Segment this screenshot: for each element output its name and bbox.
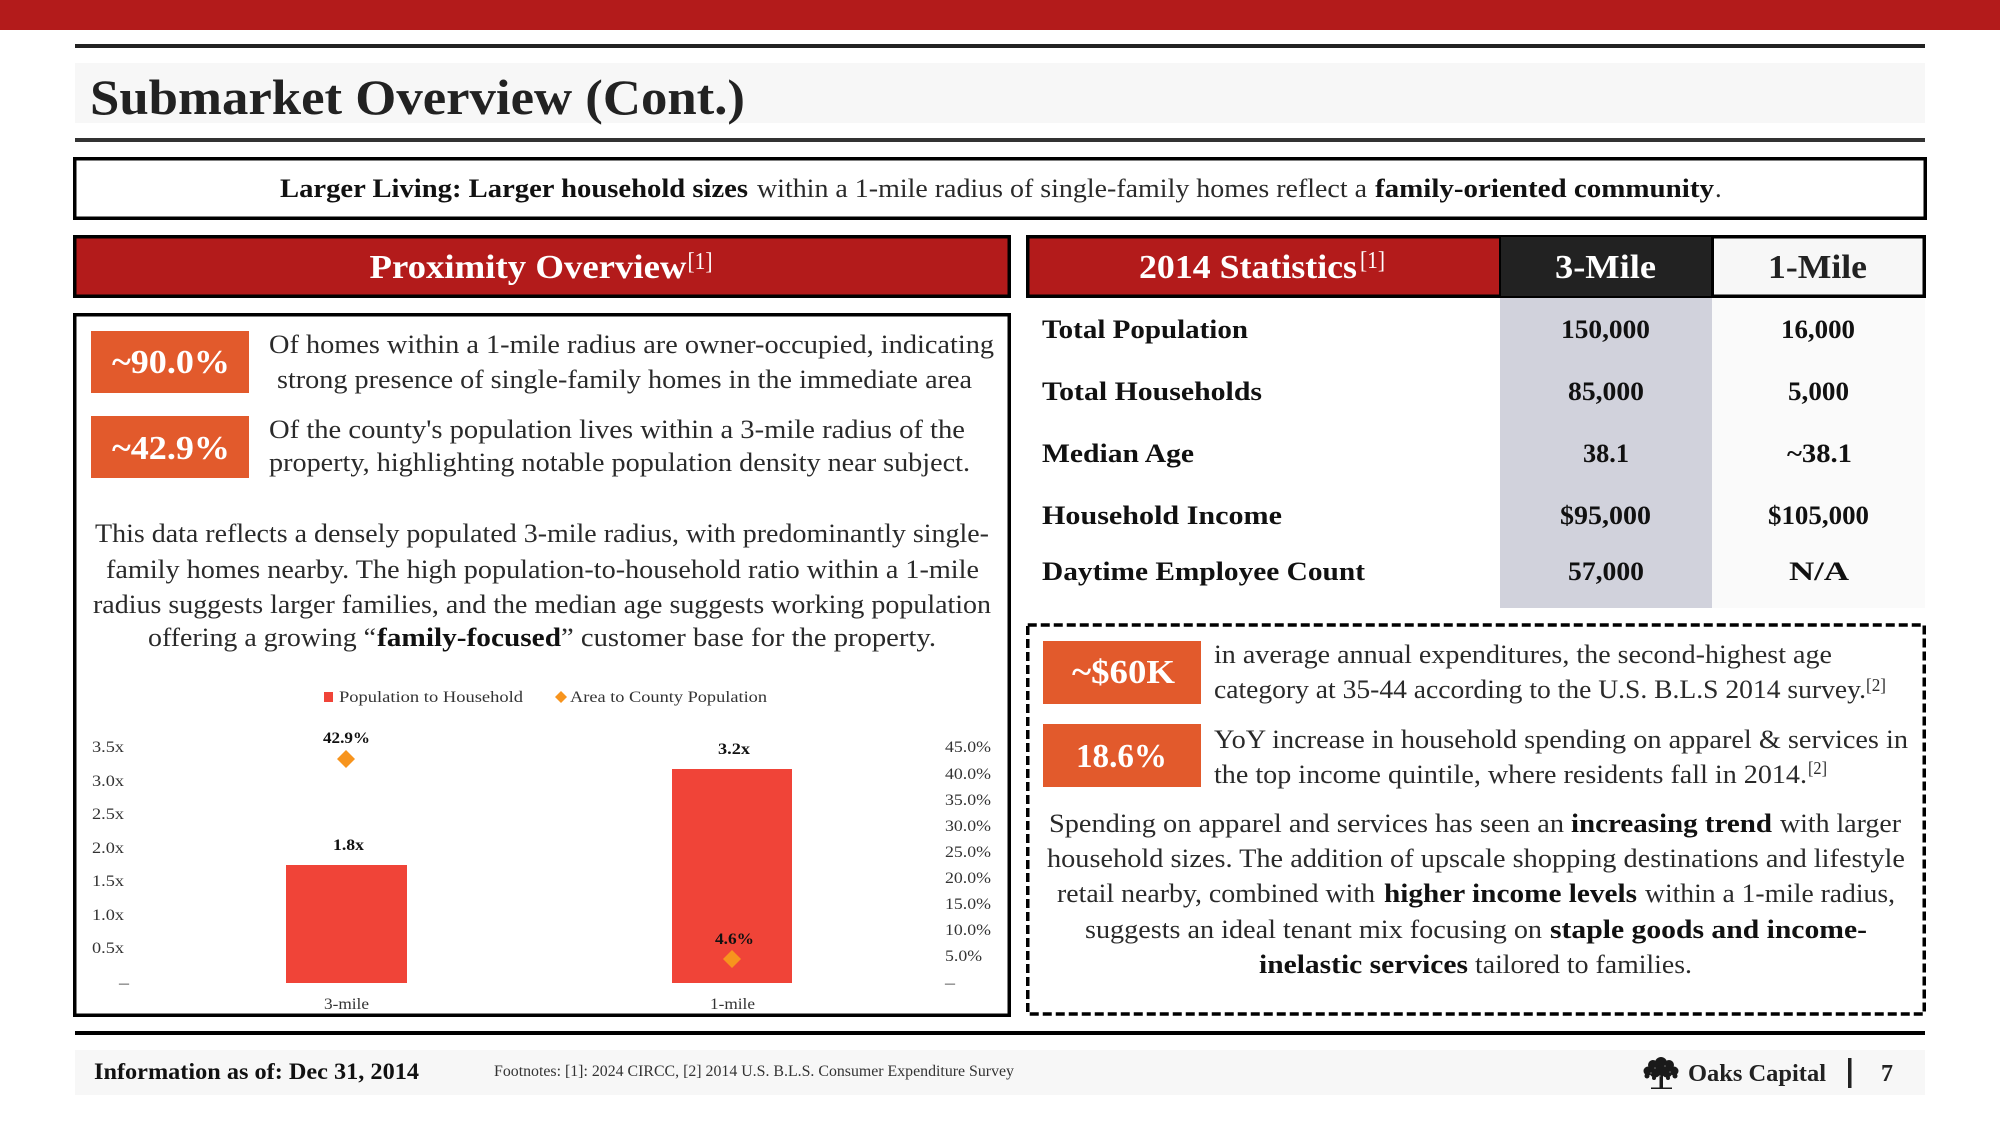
data labels: 4.6% [715,931,754,948]
panel: spending insights [1028,625,1924,1014]
text: proximity summary paragraph: family-focused [377,622,561,652]
heading: proximity overview: Proximity Overview [370,249,687,286]
text: spending summary paragraph: higher income levels [1384,878,1637,908]
table header: [1] [1360,248,1385,274]
text: spending summary paragraph: staple goods and income- [1550,914,1867,944]
text: spending summary paragraph: inelastic services [1259,949,1468,979]
table header: 3-Mile [1555,249,1656,286]
right axis: 25.0% [945,844,991,861]
1-mile values [1768,314,1869,586]
data labels [323,730,754,948]
stat badge: 42.9%: ~42.9% [112,430,230,467]
text: spending summary paragraph: household sizes. The addition of upscale shopping destinations and lifestyle [1047,843,1905,873]
text: county population share: property, highlighting notable population density near subject. [269,447,970,477]
text: household spending increase: the top income quintile, where residents fall in 2014. [1214,759,1807,789]
stat badge: 18.6% [1043,724,1201,787]
left axis: 0.5x [92,940,124,957]
logo wordmark: Oaks Capital [1688,1061,1826,1087]
left axis: 2.0x [92,840,124,857]
left axis: 1.0x [92,907,124,924]
text: spending summary paragraph: within a 1-mile radius, [1645,878,1895,908]
text: proximity summary paragraph: This data reflects a densely populated 3-mile radius, with predominantly single- [95,518,989,548]
left axis: 1.5x [92,873,124,890]
text: owner-occupied homes [269,329,994,394]
text: proximity summary paragraph [93,518,991,652]
1-mile values: 16,000 [1781,314,1855,344]
right axis [944,739,991,992]
heading: proximity overview: [1] [688,249,712,275]
callout: key takeaway: . [1715,173,1722,203]
text: household spending increase [1214,724,1908,789]
text: spending summary paragraph: Spending on apparel and services has seen an [1049,808,1564,838]
chart: population to household and area to county population [92,689,991,1013]
right axis: 45.0% [945,739,991,756]
text: annual expenditures: category at 35-44 according to the U.S. B.L.S 2014 survey. [1214,674,1866,704]
text: spending summary paragraph: retail nearby, combined with [1057,878,1375,908]
category labels: 3-mile [324,996,369,1013]
right axis: – [944,975,956,992]
row labels: Total Population [1042,314,1248,344]
stat badge: 42.9% [91,416,249,478]
title [75,63,1925,125]
text: spending summary paragraph: increasing trend [1571,808,1772,838]
table: 2014 statistics [1028,235,1925,608]
right axis: 30.0% [945,818,991,835]
left axis: – [118,975,130,992]
text: county population share [269,414,970,477]
text: spending summary paragraph [1047,808,1905,979]
legend: Area to County Population [570,689,767,706]
footnotes: Footnotes: [1]: 2024 CIRCC, [2] 2014 U.S. B.L.S. Consumer Expenditure Survey [494,1063,1014,1080]
as-of date: Information as of: Dec 31, 2014 [94,1059,419,1085]
right axis: 10.0% [945,922,991,939]
left axis: 3.5x [92,739,124,756]
bar: 1-mile [672,769,792,983]
marker: 1-mile [723,950,741,968]
right axis: 15.0% [945,896,991,913]
text: household spending increase: [2] [1808,758,1827,778]
1-mile values: 5,000 [1788,376,1849,406]
top banner [0,0,2000,30]
text: proximity summary paragraph: offering a growing “ [148,622,376,652]
heading: proximity overview [75,237,1009,296]
category labels: 1-mile [710,996,755,1013]
callout: key takeaway [75,159,1925,218]
row labels: Household Income [1042,500,1282,530]
text: proximity summary paragraph: ” customer base for the property. [561,622,936,652]
stat badge: 90.0%: ~90.0% [112,344,230,381]
row labels: Total Households [1042,376,1262,406]
text: spending summary paragraph: tailored to families. [1475,949,1692,979]
title: Submarket Overview (Cont.) [90,70,745,125]
legend [324,689,767,706]
data labels: 3.2x [718,741,750,758]
1-mile values: $105,000 [1768,500,1869,530]
stat badge: $60K [1043,641,1201,704]
3-mile values: 85,000 [1568,376,1644,406]
callout: key takeaway: within a 1-mile radius of single-family homes reflect a [757,173,1367,203]
data labels: 42.9% [323,730,370,747]
1-mile values: ~38.1 [1787,438,1852,468]
left axis: 3.0x [92,773,124,790]
row labels [1042,314,1365,586]
3-mile values: 57,000 [1568,556,1644,586]
page number: 7 [1881,1061,1893,1087]
text: proximity summary paragraph: family homes nearby. The high population-to-household ratio within a 1-mile [106,554,979,584]
marker: 3-mile [337,750,355,768]
right axis: 35.0% [945,792,991,809]
text: annual expenditures [1214,639,1886,704]
right axis: 5.0% [945,948,982,965]
table columns [1500,298,1925,608]
text: annual expenditures: in average annual expenditures, the second-highest age [1214,639,1832,669]
1-mile values: N/A [1789,556,1849,586]
right axis: 20.0% [945,870,991,887]
3-mile values: $95,000 [1560,500,1651,530]
stat badge: $60K: ~$60K [1072,654,1176,691]
text: annual expenditures: [2] [1866,675,1886,695]
text: owner-occupied homes: Of homes within a 1-mile radius are owner-occupied, indicating [269,329,994,359]
callout: key takeaway: Larger Living: Larger household sizes [280,173,748,203]
table header [1028,235,1924,298]
data labels: 1.8x [333,837,364,854]
3-mile values: 38.1 [1583,438,1629,468]
callout: key takeaway: family-oriented community [1375,173,1714,203]
text: owner-occupied homes: strong presence of single-family homes in the immediate area [277,364,972,394]
category labels [324,996,755,1013]
right axis: 40.0% [945,766,991,783]
table header: 2014 Statistics [1139,249,1357,286]
text: spending summary paragraph: suggests an ideal tenant mix focusing on [1085,914,1542,944]
text: proximity summary paragraph: radius suggests larger families, and the median age suggests working population [93,589,991,619]
text: county population share: Of the county's population lives within a 3-mile radius of the [269,414,965,444]
bar: 3-mile [286,865,407,983]
text: household spending increase: YoY increase in household spending on apparel & services in [1214,724,1908,754]
footer [75,1050,1925,1095]
stat badge: 18.6%: 18.6% [1076,738,1167,775]
3-mile values [1560,314,1651,586]
icon: oak tree logo [1644,1057,1678,1089]
row labels: Median Age [1042,438,1194,468]
row labels: Daytime Employee Count [1042,556,1365,586]
table header: 1-Mile [1768,249,1867,286]
left axis: 2.5x [92,806,124,823]
panel: proximity overview [75,315,1009,1015]
stat badge: 90.0% [91,331,249,393]
left axis [92,739,130,992]
text: spending summary paragraph: with larger [1780,808,1901,838]
legend: Population to Household [339,689,523,706]
3-mile values: 150,000 [1561,314,1650,344]
